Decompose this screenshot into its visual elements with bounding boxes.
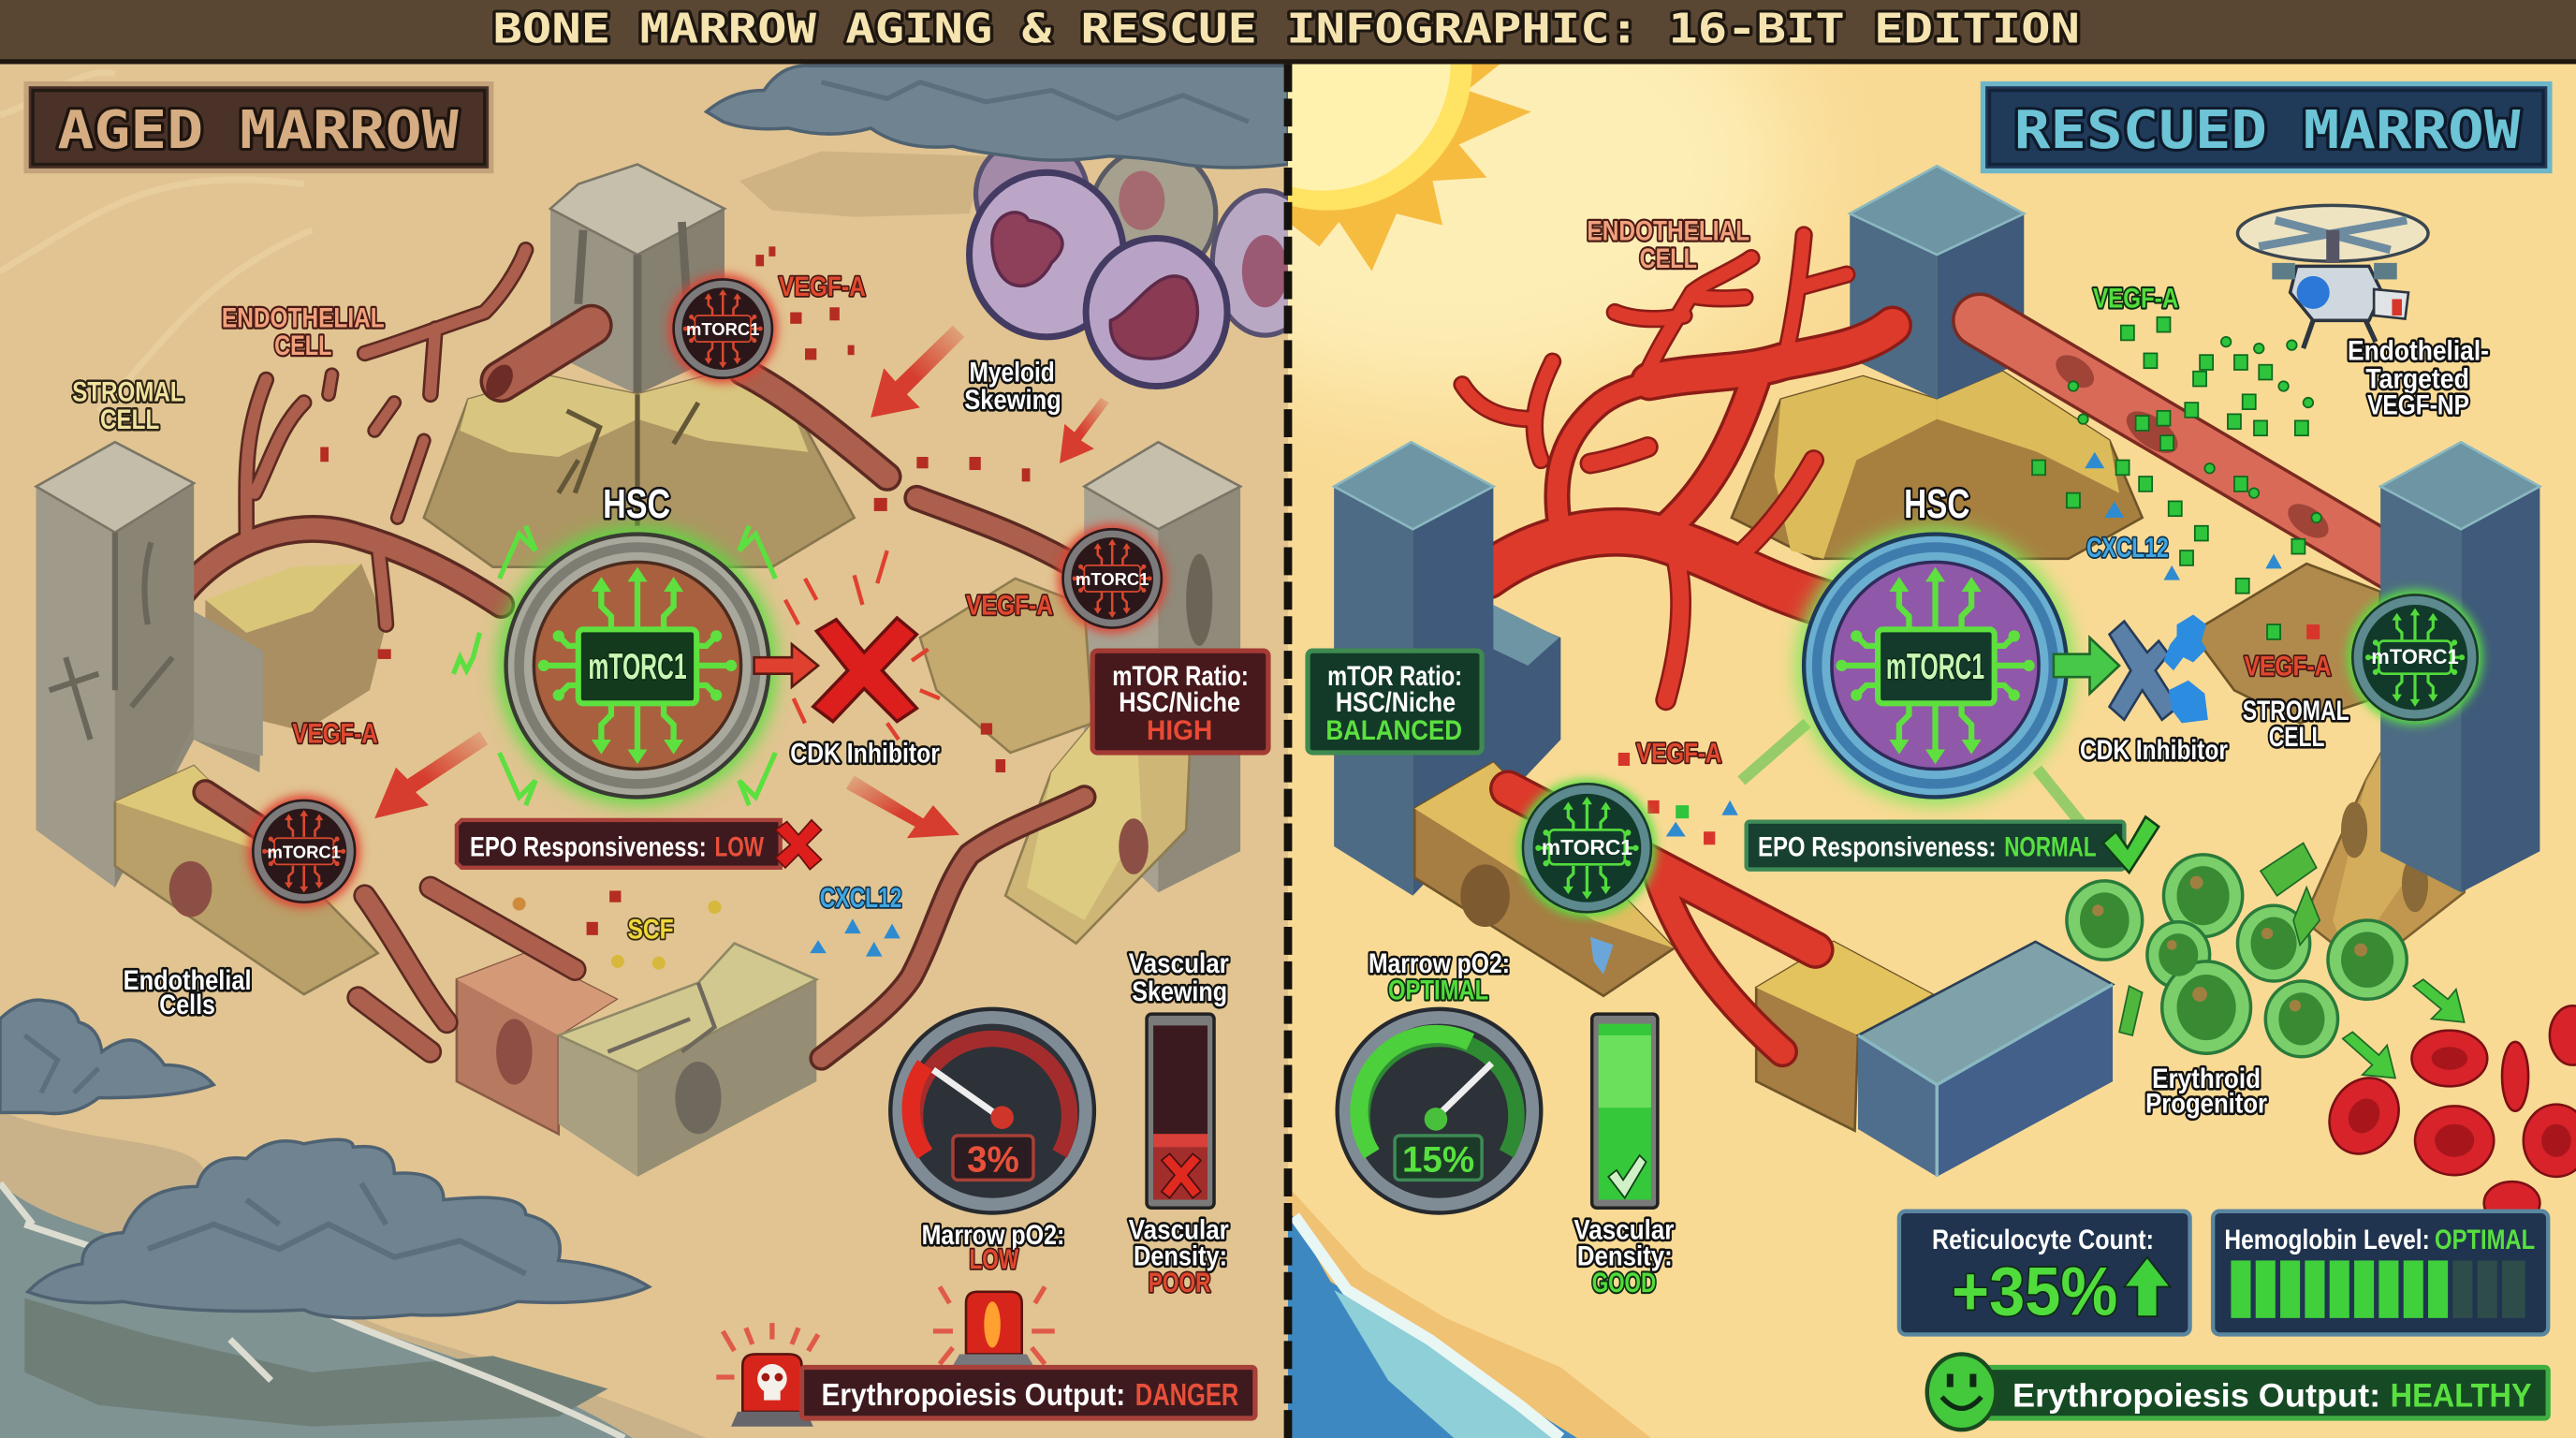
labels: rescued niche: Erythroid: [2152, 1064, 2261, 1094]
icon: alarm siren: [933, 1287, 1055, 1366]
block: right strut rescued: [2304, 690, 2472, 970]
HSC aged: mTORC1: [588, 647, 687, 687]
block: top center pillar aged: [550, 165, 724, 394]
title bar: [0, 0, 2576, 64]
background: rescued sand: [1288, 0, 2576, 1438]
gauge and bar labels aged: Marrow pO2:: [922, 1220, 1064, 1251]
panel: hemoglobin level: OPTIMAL: [2435, 1225, 2535, 1255]
labels: aged niche: Endothelial: [124, 965, 252, 996]
block: left stromal pillar aged: [37, 442, 263, 888]
panel: mTOR ratio aged: HIGH: [1147, 715, 1212, 746]
cloud: lower left large: [28, 1139, 649, 1318]
labels: rescued niche: STROMAL: [2243, 696, 2349, 726]
badge: aged marrow: AGED MARROW: [57, 100, 459, 161]
gauge and bar labels aged: LOW: [970, 1244, 1019, 1275]
gauge and bar labels rescued: Vascular: [1573, 1215, 1675, 1246]
HSC label aged: HSC: [603, 481, 670, 527]
arrow: mTORC1 to CDK inhibitor rescued: [2054, 638, 2119, 694]
labels: aged niche: CELL: [274, 330, 332, 361]
bar: vascular skewing aged: [1147, 1014, 1214, 1208]
sky glow rescued: [1288, 64, 1818, 425]
panel: mTOR ratio aged: HSC/Niche: [1119, 687, 1240, 718]
gauge: marrow pO2 aged: 3%: [967, 1140, 1019, 1181]
labels: aged niche: VEGF-A: [292, 718, 378, 749]
arrows: progenitors to red cells: [2343, 979, 2465, 1078]
mTORC1 badge lower aged: mTORC1: [267, 842, 341, 861]
rescued shoreline and water: [1288, 1186, 1651, 1438]
labels: rescued niche: Progenitor: [2145, 1088, 2267, 1119]
shadow under top cloud: [739, 151, 986, 217]
panel: reticulocyte count: +35%: [1952, 1252, 2117, 1329]
gauge and bar labels aged: Density:: [1134, 1241, 1227, 1272]
panel: erythropoiesis output healthy: HEALTHY: [2391, 1378, 2532, 1415]
icon: skull siren: [716, 1323, 818, 1427]
HSC aged: [453, 526, 775, 805]
labels: rescued niche: [1587, 215, 2489, 1119]
block: top pillar rescued: [1850, 166, 2024, 400]
panel: EPO responsiveness rescued: [1747, 816, 2159, 873]
panel: mTOR ratio rescued: BALANCED: [1325, 715, 1462, 746]
labels: aged niche: STROMAL: [72, 376, 184, 407]
gauge: marrow pO2 aged: [890, 1009, 1094, 1213]
labels: aged niche: CXCL12: [820, 883, 902, 914]
gauge and bar labels rescued: Marrow pO2:: [1368, 948, 1510, 979]
panel: erythropoiesis output healthy: [1986, 1368, 2548, 1418]
particles: SCF and CXCL12: [513, 890, 900, 970]
labels: rescued niche: VEGF-A: [1636, 739, 1721, 770]
aged shoreline and sea: [0, 1111, 707, 1438]
block: lower left yellow aged: [115, 766, 378, 994]
block: left pillar rescued: [1334, 442, 1560, 896]
labels: rescued niche: CELL: [1640, 243, 1697, 274]
panel: EPO responsiveness rescued: EPO Responsiveness:: [1758, 832, 1996, 863]
panel: EPO responsiveness aged: [457, 820, 822, 870]
mTORC1 badge top aged: [668, 274, 777, 383]
badge: rescued marrow: RESCUED MARROW: [2014, 100, 2521, 161]
panel: EPO responsiveness aged: EPO Responsiveness:: [470, 832, 707, 863]
mTORC1 badge right aged: [1058, 524, 1166, 633]
HSC rescued: [1797, 527, 2073, 803]
panel: reticulocyte count: Reticulocyte Count:: [1932, 1225, 2154, 1255]
panel: EPO responsiveness aged: LOW: [714, 832, 765, 863]
mTORC1 badge lower rescued: [1518, 779, 1656, 917]
panel: reticulocyte count: [1899, 1211, 2190, 1334]
labels: rescued niche: CELL: [2269, 722, 2324, 753]
mTORC1 badge right aged: mTORC1: [1076, 569, 1149, 589]
labels: aged niche: [72, 271, 1061, 1020]
block: red bottom center aged: [457, 953, 616, 1134]
gauge and bar labels aged: Skewing: [1132, 976, 1227, 1007]
lower aged vessels: [205, 792, 1084, 1058]
particles: red rescued: [1618, 624, 2320, 844]
labels: aged niche: VEGF-A: [966, 591, 1053, 622]
mTORC1 badge top aged: mTORC1: [686, 319, 759, 339]
mTORC1 badge lower aged: [248, 796, 359, 907]
panel: mTOR ratio aged: mTOR Ratio:: [1112, 661, 1249, 692]
panel: erythropoiesis output danger: [801, 1368, 1255, 1418]
forked vessel rescued: [1508, 789, 1815, 1051]
panel: mTOR ratio rescued: mTOR Ratio:: [1327, 661, 1462, 692]
arrows: HSC to niche aged: [374, 731, 959, 838]
block: tan center aged: [424, 372, 855, 567]
arrows: myeloid skewing: [871, 326, 1109, 463]
mTORC1 badge right rescued: [2348, 590, 2482, 725]
block: right yellow aged: [1005, 674, 1191, 944]
block: yellow beside stromal: [205, 564, 386, 731]
panel: erythropoiesis output healthy: Erythropoiesis Output:: [2012, 1378, 2380, 1415]
labels: rescued niche: Targeted: [2365, 363, 2469, 394]
gauge and bar labels aged: Vascular: [1129, 1215, 1229, 1246]
particles: red debris aged: [320, 246, 1030, 772]
labels: aged niche: VEGF-A: [779, 271, 866, 302]
label: CDK inhibitor aged: CDK Inhibitor: [790, 739, 940, 770]
faint green pathway arrows: [1741, 723, 2086, 829]
HSC label rescued: HSC: [1904, 481, 1969, 527]
block: right pillar aged: [1084, 442, 1240, 892]
labels: aged niche: ENDOTHELIAL: [222, 302, 385, 333]
icon: red X aged: [813, 618, 916, 722]
center divider: [1286, 64, 1290, 1438]
upper aged vessels: [178, 250, 1068, 624]
gauge: marrow pO2 rescued: [1338, 1009, 1541, 1213]
vessel tree and drug-target vessel rescued: [1462, 235, 2407, 700]
panel: erythropoiesis output danger: DANGER: [1135, 1378, 1238, 1413]
panel: mTOR ratio rescued: [1308, 651, 1482, 753]
gauge and bar labels aged: [922, 948, 1229, 1299]
panel: hemoglobin level: Hemoglobin Level:: [2224, 1225, 2430, 1255]
labels: rescued niche: Endothelial-: [2348, 335, 2489, 366]
badge: rescued marrow: [1983, 84, 2550, 171]
gauge: marrow pO2 rescued: 15%: [1402, 1140, 1474, 1181]
icon: smiley: [1927, 1354, 1996, 1430]
block: brown diamond rescued: [2191, 564, 2380, 723]
labels: rescued niche: VEGF-A: [2244, 651, 2331, 682]
labels: aged niche: Myeloid: [970, 357, 1055, 388]
mTORC1 badge lower rescued: mTORC1: [1542, 835, 1632, 859]
panel: EPO responsiveness rescued: NORMAL: [2004, 832, 2097, 863]
block: pale bottom center aged: [559, 944, 816, 1177]
labels: rescued niche: VEGF-NP: [2367, 389, 2469, 420]
gauge and bar labels aged: Vascular: [1129, 948, 1229, 979]
title bar: BONE MARROW AGING & RESCUE INFOGRAPHIC: 16-BIT EDITION: [493, 6, 2080, 53]
helicopter drug carrier: [2237, 205, 2428, 348]
cloud: lower left small: [0, 1000, 213, 1113]
sparks: [785, 550, 940, 740]
gauge and bar labels aged: POOR: [1149, 1268, 1211, 1299]
gauge and bar labels rescued: Density:: [1577, 1241, 1673, 1272]
particles: CXCL12 triangles rescued: [2085, 452, 2282, 580]
gauge and bar labels rescued: GOOD: [1592, 1268, 1656, 1299]
mTORC1 badge right rescued: mTORC1: [2371, 645, 2459, 668]
myeloid cells: [966, 154, 1288, 389]
labels: rescued niche: VEGF-A: [2093, 283, 2178, 314]
block: right pillar rescued: [2380, 442, 2539, 892]
labels: aged niche: SCF: [627, 914, 674, 945]
green fragments: [2119, 844, 2320, 1035]
panel: hemoglobin level: [2213, 1211, 2548, 1334]
panel: erythropoiesis output danger: Erythropoiesis Output:: [822, 1378, 1125, 1413]
block: lower yellow rescued: [1414, 763, 1674, 996]
block: bottom yellow rescued: [1756, 942, 1932, 1131]
labels: rescued niche: CXCL12: [2086, 533, 2169, 564]
cloud: top storm: [707, 66, 1288, 168]
label: CDK inhibitor rescued: CDK Inhibitor: [2080, 735, 2228, 766]
block: yellow center rescued: [1732, 372, 2143, 559]
sand streaks aged: [0, 73, 493, 411]
panel: mTOR ratio rescued: HSC/Niche: [1336, 687, 1456, 718]
particles: VEGF nanoparticles rescued: [2032, 317, 2321, 639]
gauge and bar labels rescued: OPTIMAL: [1388, 975, 1488, 1005]
labels: aged niche: Cells: [159, 990, 215, 1020]
labels: rescued niche: ENDOTHELIAL: [1587, 215, 1749, 246]
badge: aged marrow: [26, 84, 491, 171]
labels: aged niche: CELL: [100, 404, 159, 435]
sun: [1288, 64, 1531, 271]
gauge and bar labels rescued: [1368, 948, 1675, 1299]
icon: broken blue X: [2110, 615, 2208, 723]
erythroid progenitor cells: [2067, 855, 2407, 1057]
bar: vascular density rescued: [1592, 1014, 1658, 1208]
background: aged sand: [0, 0, 1288, 1438]
block: bottom blue rescued: [1858, 942, 2113, 1177]
HSC rescued: mTORC1: [1886, 647, 1984, 687]
arrow: mTORC1 to CDK inhibitor aged: [754, 644, 818, 687]
block: tan diamond aged: [920, 579, 1092, 753]
labels: aged niche: Skewing: [964, 385, 1061, 416]
red blood cells: [2316, 1005, 2576, 1225]
vessel nuclei: [2050, 348, 2334, 545]
panel: mTOR ratio aged: [1092, 651, 1268, 753]
